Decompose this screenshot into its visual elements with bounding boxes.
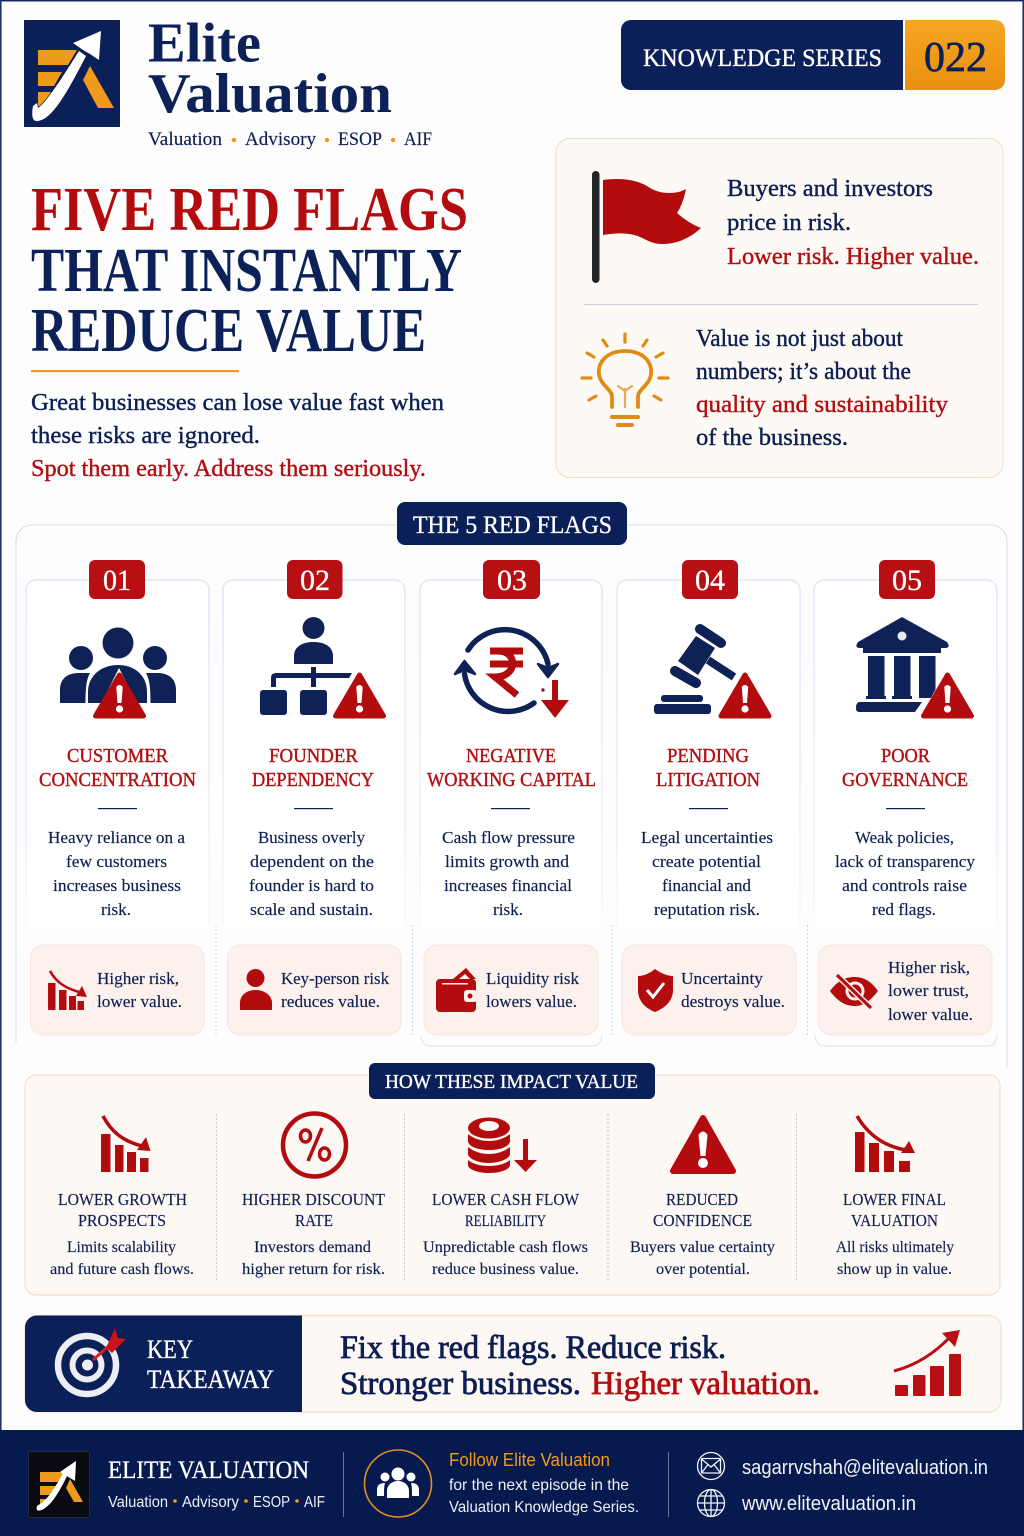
text: description 02: dependent on the	[250, 852, 374, 871]
icon: rupee cycle with down arrow	[455, 630, 569, 718]
item: reduced confidence: CONFIDENCE	[653, 1211, 752, 1230]
number badge 03: 03	[497, 564, 527, 597]
brand tagline: Valuation	[148, 129, 222, 150]
text: description 01: increases business	[53, 876, 181, 895]
text: description 03: Cash flow pressure	[442, 828, 575, 847]
footer brand: ELITE VALUATION	[108, 1457, 309, 1484]
text: description 04: Legal uncertainties	[641, 828, 773, 847]
icon: wallet	[436, 968, 477, 1012]
card 02 founder dependency	[223, 560, 405, 1035]
icon: light bulb	[582, 334, 668, 425]
callout: higher risk lower trust: lower value.	[888, 1005, 973, 1024]
text: website: www.elitevaluation.in	[741, 1492, 916, 1515]
heading: pending litigation: LITIGATION	[656, 769, 760, 791]
heading: negative working capital	[427, 745, 596, 791]
card 03 negative working capital	[420, 560, 602, 1046]
title: THAT INSTANTLY	[31, 237, 462, 305]
item: reduced confidence: Buyers value certainty	[630, 1239, 775, 1256]
title: FIVE RED FLAGS	[31, 176, 468, 244]
item: lower growth prospects: Limits scalability	[67, 1239, 176, 1256]
callout: uncertainty	[622, 945, 796, 1035]
text: description 01: few customers	[66, 852, 167, 871]
text: description 05: red flags.	[872, 900, 936, 919]
number badge 02: 02	[300, 564, 330, 597]
heading: pending litigation: PENDING	[667, 745, 749, 767]
badge: knowledge series 022: KNOWLEDGE SERIES	[643, 45, 882, 72]
item: lower cash flow reliability: Unpredictable cash flows	[423, 1239, 588, 1256]
icon: percent circle	[283, 1114, 346, 1176]
text: follow call to action: for the next episode in the	[449, 1477, 629, 1494]
text: follow call to action: Follow Elite Valuation	[449, 1449, 610, 1470]
text: description 02	[249, 828, 374, 919]
brand name	[148, 12, 392, 125]
icon: shield check	[638, 969, 673, 1012]
icon: falling bars	[101, 1116, 150, 1172]
footer brand: Advisory	[182, 1494, 239, 1511]
icon: coin stack with down arrow	[468, 1118, 537, 1173]
item: lower cash flow reliability	[423, 1118, 588, 1278]
item: lower final valuation: LOWER FINAL	[843, 1190, 946, 1209]
heading: pending litigation	[656, 745, 760, 791]
title	[31, 176, 468, 365]
item: higher discount rate: RATE	[295, 1211, 333, 1230]
item: higher discount rate: Investors demand	[254, 1239, 371, 1256]
heading: poor governance	[842, 745, 968, 791]
text: takeaway message	[340, 1330, 820, 1402]
number badge 02	[287, 560, 342, 599]
item: lower cash flow reliability: LOWER CASH FLOW	[432, 1190, 579, 1209]
panel: the 5 red flags outer frame	[16, 525, 1007, 1068]
text: email: sagarrvshah@elitevaluation.in	[742, 1456, 988, 1479]
icon: customers with warning	[60, 628, 176, 722]
footer brand: ESOP	[253, 1494, 290, 1511]
text: description 03: increases financial	[444, 876, 572, 895]
text: value is about quality: numbers; it’s about the	[696, 359, 911, 385]
brand name: Valuation	[148, 63, 392, 125]
footer brand	[108, 1457, 325, 1511]
brand tagline	[148, 129, 432, 150]
text: description 04: financial and	[662, 876, 752, 895]
icon: red flag	[592, 171, 701, 283]
item: lower growth prospects: LOWER GROWTH	[58, 1190, 187, 1209]
text: description 01: Heavy reliance on a	[48, 828, 186, 847]
text: value is about quality: quality and sustainability	[696, 392, 948, 418]
text: value is about quality: of the business.	[696, 425, 848, 451]
intro text: Spot them early. Address them seriously.	[31, 455, 426, 482]
item: lower growth prospects	[50, 1116, 194, 1278]
text: key takeaway label: TAKEAWAY	[147, 1365, 274, 1394]
icon: target with dart	[58, 1328, 126, 1394]
card 01 customer concentration	[26, 560, 209, 1035]
item: lower final valuation	[836, 1116, 954, 1278]
callout: higher risk lower value: lower value.	[97, 992, 182, 1011]
text: key takeaway label: KEY	[147, 1335, 193, 1364]
logo: Elite Valuation mark	[24, 20, 120, 127]
item: lower final valuation: show up in value.	[837, 1261, 952, 1278]
text: description 01: risk.	[101, 900, 131, 919]
heading: how these impact value: HOW THESE IMPACT VALUE	[385, 1071, 638, 1093]
heading: founder dependency: FOUNDER	[269, 745, 359, 767]
item: reduced confidence	[630, 1118, 775, 1278]
heading: how these impact value	[369, 1063, 655, 1099]
text: description 04: reputation risk.	[654, 900, 760, 919]
icon: crossed eye	[830, 975, 878, 1008]
text: value is about quality	[696, 326, 948, 451]
icon: person	[240, 969, 272, 1010]
text: description 03: risk.	[493, 900, 523, 919]
item: lower final valuation: VALUATION	[851, 1211, 938, 1230]
text: description 05: Weak policies,	[855, 828, 954, 847]
callout: higher risk lower trust	[815, 945, 997, 1046]
item: higher discount rate	[242, 1114, 385, 1278]
number badge 04: 04	[695, 564, 725, 597]
badge: knowledge series 022: 022	[924, 35, 987, 81]
icon: institution with warning	[856, 617, 976, 722]
text: key takeaway label	[147, 1335, 274, 1394]
text: buyers price in risk	[727, 176, 979, 270]
text: description 05: lack of transparency	[835, 852, 976, 871]
title: REDUCE VALUE	[31, 297, 426, 365]
callout: uncertainty: Uncertainty	[681, 969, 764, 988]
text: buyers price in risk: Lower risk. Higher value.	[727, 244, 979, 270]
brand tagline: Advisory	[245, 129, 316, 150]
heading: poor governance: POOR	[881, 745, 931, 767]
card 05 poor governance	[814, 560, 997, 1046]
intro text: these risks are ignored.	[31, 422, 260, 449]
icon: org chart with warning	[260, 617, 384, 716]
text: takeaway message: Fix the red flags. Reduce risk.	[340, 1330, 726, 1366]
callout: higher risk lower trust: Higher risk,	[888, 958, 970, 977]
footer brand: Valuation	[108, 1494, 168, 1511]
icon: community	[364, 1450, 432, 1517]
text: buyers price in risk: Buyers and investors	[727, 176, 933, 202]
item: lower cash flow reliability: RELIABILITY	[465, 1213, 546, 1230]
callout: key-person risk: reduces value.	[281, 992, 380, 1011]
panel: key takeaway	[25, 1316, 1001, 1412]
callout: higher risk lower value	[30, 945, 204, 1035]
brand tagline: AIF	[404, 129, 432, 150]
item: lower growth prospects: PROSPECTS	[78, 1211, 166, 1230]
callout: uncertainty: destroys value.	[681, 992, 785, 1011]
heading: negative working capital: NEGATIVE	[466, 745, 556, 767]
number badge 05	[879, 560, 935, 599]
icon: gavel with warning	[654, 629, 769, 716]
intro text	[31, 389, 444, 482]
text: follow call to action	[449, 1449, 639, 1516]
icon: mail	[698, 1452, 724, 1480]
text: description 05: and controls raise	[842, 876, 967, 895]
text: description 02: Business overly	[258, 828, 366, 847]
heading: customer concentration: CUSTOMER	[67, 745, 169, 767]
icon: globe	[698, 1490, 724, 1516]
heading: founder dependency	[252, 745, 374, 791]
callout: liquidity risk: Liquidity risk	[486, 969, 580, 988]
heading: poor governance: GOVERNANCE	[842, 769, 968, 791]
text: buyers price in risk: price in risk.	[727, 210, 851, 236]
item: lower growth prospects: and future cash flows.	[50, 1261, 194, 1278]
icon: rising bars	[894, 1330, 961, 1396]
footer	[0, 1430, 1024, 1536]
number badge 05: 05	[892, 564, 922, 597]
number badge 03	[483, 560, 540, 599]
icon: falling bars	[855, 1116, 915, 1172]
callout: key-person risk	[228, 945, 401, 1035]
text: description 04	[641, 828, 773, 919]
text: description 02: founder is hard to	[249, 876, 374, 895]
heading: customer concentration: CONCENTRATION	[39, 769, 196, 791]
icon: falling bars	[48, 971, 87, 1010]
callout: liquidity risk	[421, 945, 602, 1046]
intro text: Great businesses can lose value fast when	[31, 389, 444, 416]
text: description 02: scale and sustain.	[250, 900, 373, 919]
text: description 03: limits growth and	[445, 852, 570, 871]
text: takeaway message: Stronger business.	[340, 1366, 581, 1402]
brand tagline: ESOP	[338, 129, 382, 150]
footer brand: AIF	[304, 1494, 325, 1511]
text: description 04: create potential	[652, 852, 761, 871]
panel: why it matters	[556, 138, 1003, 478]
item: higher discount rate: higher return for risk.	[242, 1261, 385, 1278]
callout: higher risk lower trust: lower trust,	[888, 981, 969, 1000]
text: description 01	[48, 828, 186, 919]
item: lower cash flow reliability: reduce business value.	[432, 1261, 579, 1278]
footer logo	[28, 1452, 90, 1518]
callout: key-person risk: Key-person risk	[281, 969, 390, 988]
item: reduced confidence: REDUCED	[666, 1190, 738, 1209]
text: description 03	[442, 828, 575, 919]
heading: the 5 red flags: THE 5 RED FLAGS	[413, 512, 612, 539]
text: value is about quality: Value is not just about	[696, 326, 903, 352]
icon: warning triangle	[673, 1118, 733, 1171]
item: higher discount rate: HIGHER DISCOUNT	[242, 1190, 385, 1209]
number badge 01	[89, 560, 145, 599]
callout: higher risk lower value: Higher risk,	[97, 969, 179, 988]
heading: the 5 red flags	[397, 502, 627, 545]
heading: negative working capital: WORKING CAPITAL	[427, 769, 596, 791]
heading: customer concentration	[39, 745, 196, 791]
text: follow call to action: Valuation Knowledge Series.	[449, 1499, 639, 1516]
number badge 04	[682, 560, 738, 599]
item: lower final valuation: All risks ultimately	[836, 1239, 954, 1256]
callout: liquidity risk: lowers value.	[486, 992, 577, 1011]
card 04 pending litigation	[617, 560, 800, 1035]
brand name: Elite	[148, 12, 261, 74]
text: description 05	[835, 828, 976, 919]
badge: knowledge series 022	[621, 20, 1005, 90]
heading: founder dependency: DEPENDENCY	[252, 769, 374, 791]
panel: how these impact value	[25, 1063, 1000, 1295]
text: takeaway message: Higher valuation.	[591, 1366, 820, 1402]
item: reduced confidence: over potential.	[656, 1261, 750, 1278]
number badge 01: 01	[103, 564, 131, 597]
